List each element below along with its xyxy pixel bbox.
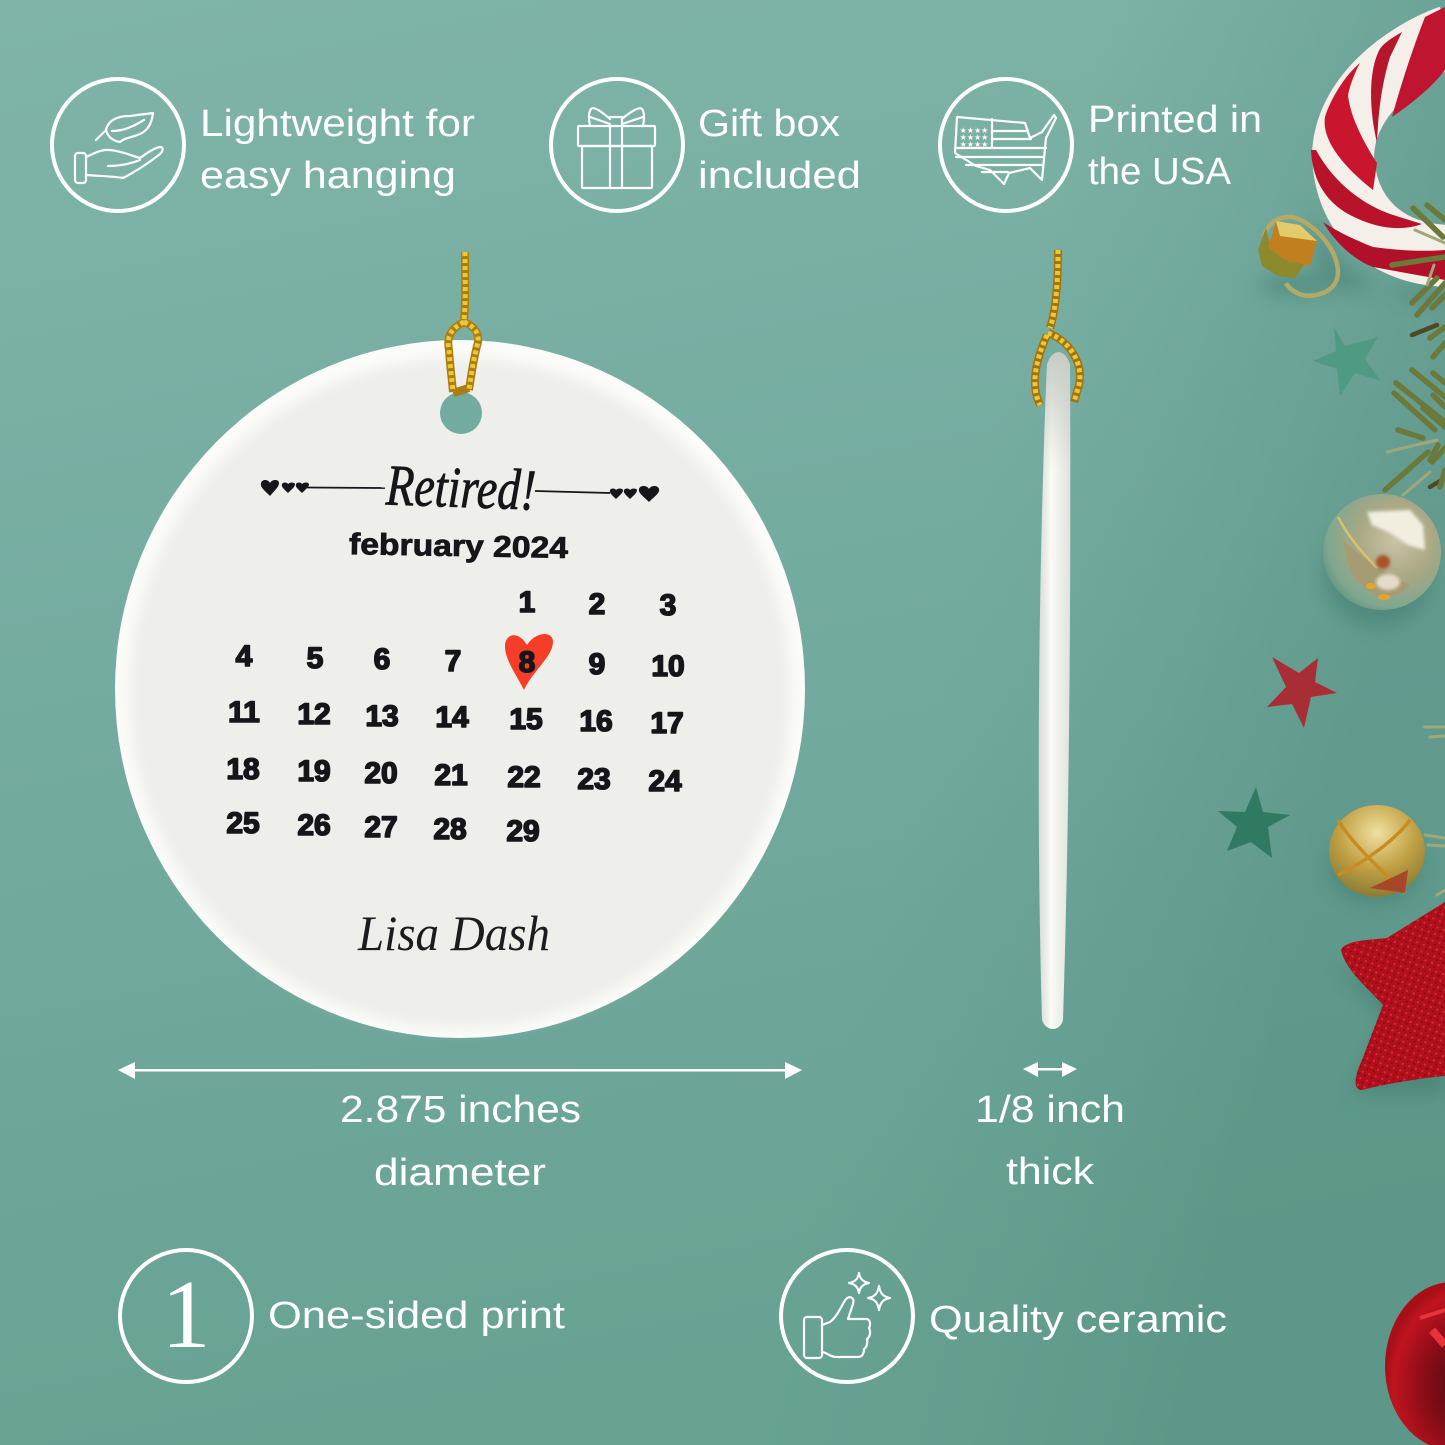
ornament side view <box>1035 250 1080 1029</box>
calendar numbers: 23 <box>577 763 611 796</box>
text: printed in USA: the USA <box>1088 151 1232 193</box>
calendar numbers: 28 <box>433 813 467 846</box>
text: gift box: Gift box <box>698 103 840 145</box>
calendar numbers: 22 <box>507 761 541 794</box>
dimension arrow: diameter <box>118 1062 802 1079</box>
dimension label: thickness: thick <box>1006 1151 1095 1193</box>
feature: printed in USA <box>940 79 1262 211</box>
dimension label: diameter: diameter <box>374 1152 546 1194</box>
decoration: candy cane <box>1311 7 1445 280</box>
feature: gift box <box>551 79 861 211</box>
heading divider left <box>261 480 385 496</box>
dimension label: thickness <box>975 1089 1125 1193</box>
calendar numbers: 25 <box>226 807 260 840</box>
decoration: red glitter star <box>1341 902 1445 1090</box>
feature: lightweight <box>52 79 475 211</box>
calendar numbers: 7 <box>445 645 461 678</box>
decoration: green confetti star <box>1313 327 1381 396</box>
decoration: red bauble <box>1385 1282 1445 1445</box>
calendar numbers: 13 <box>365 700 399 733</box>
text: gift box: included <box>698 155 861 197</box>
icon: hand with feather <box>52 79 184 211</box>
calendar numbers <box>226 586 685 848</box>
text: one-sided print: One-sided print <box>268 1295 565 1337</box>
decoration: red confetti star <box>1267 657 1337 728</box>
text: lightweight: Lightweight for <box>200 103 475 145</box>
calendar numbers: 27 <box>364 811 398 844</box>
dimension arrow: thickness <box>1023 1062 1077 1077</box>
heading: Retired!: Retired! <box>384 452 537 523</box>
ornament front view <box>115 252 805 1038</box>
calendar numbers: 18 <box>226 753 260 786</box>
calendar numbers: 9 <box>589 648 605 681</box>
dimension label: diameter <box>340 1089 581 1194</box>
calendar numbers: 2 <box>589 588 605 621</box>
calendar numbers: 16 <box>579 705 613 738</box>
name: Lisa Dash: Lisa Dash <box>357 905 550 961</box>
calendar numbers: 20 <box>364 757 398 790</box>
ceramic edge <box>1039 352 1070 1029</box>
calendar numbers: 6 <box>374 643 390 676</box>
text: gift box <box>698 103 861 197</box>
ceramic disc <box>115 340 805 1038</box>
icon: number one <box>120 1250 252 1382</box>
gold cord <box>448 252 478 393</box>
calendar numbers: 29 <box>506 815 540 848</box>
calendar numbers: 12 <box>297 698 331 731</box>
calendar numbers: 19 <box>297 755 331 788</box>
icon: USA flag map <box>940 79 1072 211</box>
calendar numbers: 8 <box>519 646 535 679</box>
calendar numbers: 1 <box>519 586 535 619</box>
gold cord side <box>1035 250 1080 405</box>
month label: february 2024 <box>349 528 569 565</box>
decoration: gold ribbon curl <box>1258 217 1338 296</box>
calendar numbers: 4 <box>236 640 253 673</box>
text: printed in USA <box>1088 99 1262 193</box>
decoration: pine needles upper <box>1385 205 1445 495</box>
calendar numbers: 3 <box>660 589 676 622</box>
decoration: silver bauble <box>1323 494 1441 610</box>
feature: one-sided print <box>120 1250 565 1382</box>
decoration: gold jingle bell <box>1329 805 1425 897</box>
feature: quality ceramic <box>781 1250 1227 1382</box>
calendar numbers: 26 <box>297 809 331 842</box>
dimension label: thickness: 1/8 inch <box>975 1089 1125 1131</box>
icon: number one: 1 <box>162 1261 210 1369</box>
text: lightweight: easy hanging <box>200 155 456 197</box>
icon: USA flag map: ★★★★ <box>960 133 988 142</box>
icon: thumbs up with sparkles <box>781 1250 913 1382</box>
calendar numbers: 21 <box>434 759 468 792</box>
calendar numbers: 5 <box>307 642 323 675</box>
calendar numbers: 24 <box>648 765 682 798</box>
decoration: dark green confetti star <box>1218 787 1290 858</box>
icon: USA flag map: ★★★★ <box>960 126 988 135</box>
calendar numbers: 11 <box>228 696 260 729</box>
text: printed in USA: Printed in <box>1088 99 1262 141</box>
icon: gift box <box>551 79 683 211</box>
icon: USA flag map: ★★★★ <box>960 140 988 149</box>
decoration: shadows <box>1259 200 1445 1095</box>
calendar numbers: 17 <box>650 707 684 740</box>
decoration: small needles <box>1424 727 1445 895</box>
text: lightweight <box>200 103 475 197</box>
calendar heart on the 8th <box>505 634 553 690</box>
calendar numbers: 15 <box>509 703 543 736</box>
text: quality ceramic: Quality ceramic <box>929 1299 1227 1341</box>
calendar numbers: 10 <box>651 650 685 683</box>
calendar numbers: 14 <box>435 701 469 734</box>
heading divider right <box>535 486 659 502</box>
dimension label: diameter: 2.875 inches <box>340 1089 581 1131</box>
